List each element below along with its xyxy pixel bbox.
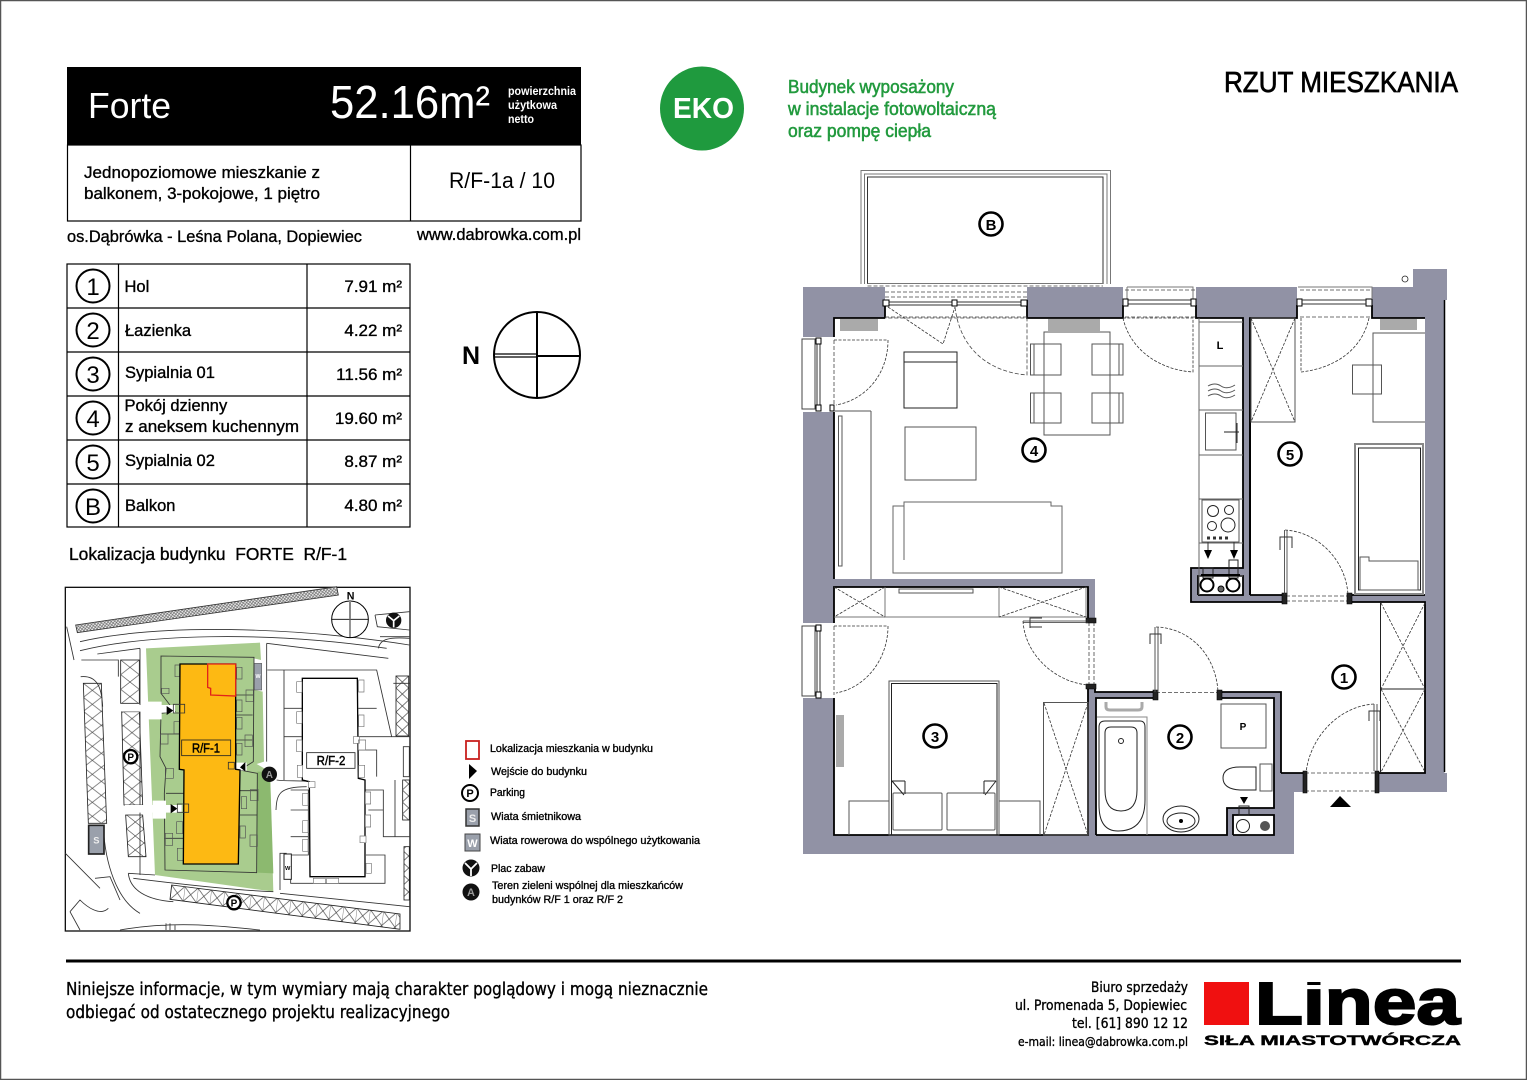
room label 4: 4 xyxy=(1030,443,1039,460)
area caption: netto xyxy=(508,112,534,126)
area: 52.16 m2: 52.16m² xyxy=(330,76,490,128)
site plan: label R/F-1 xyxy=(182,740,231,756)
legend: shared green area: Teren zieleni wspólnej dla mieszkańców xyxy=(492,880,683,892)
site plan: entrance markers xyxy=(167,704,245,813)
EKO description: oraz pompę ciepła xyxy=(788,121,932,141)
table of rooms: z aneksem kuchennym xyxy=(125,418,299,436)
hall wardrobe xyxy=(1380,603,1425,772)
site plan: parking icon: P xyxy=(127,752,134,763)
site plan: paths to entrances xyxy=(122,702,247,819)
site plan: bicycle shelter xyxy=(254,663,262,690)
table of rooms: Sypialnia 02 xyxy=(125,452,215,470)
legend: apartment location xyxy=(466,741,653,759)
site plan: shared green area icon: A xyxy=(266,770,273,781)
sales office contact: ul. Promenada 5, Dopiewiec xyxy=(1015,998,1187,1014)
site plan: parking icon xyxy=(124,750,137,763)
walls xyxy=(803,269,1447,854)
room label 5 xyxy=(1278,442,1302,466)
website: www.dabrowka.com.pl xyxy=(416,225,581,244)
EKO description: Budynek wyposażony xyxy=(788,77,954,97)
room label 5: 5 xyxy=(1286,447,1294,464)
site plan: waste shelter xyxy=(89,825,104,854)
room label B xyxy=(980,212,1002,236)
bedroom 3 furniture xyxy=(834,587,1088,835)
legend: bicycle shelter: W xyxy=(467,838,478,850)
floor plan xyxy=(801,170,1447,854)
legend: shared green area: budynków R/F 1 oraz R/F 2 xyxy=(492,894,623,906)
site plan: building R/F-2 xyxy=(302,678,365,877)
legend: parking: P xyxy=(466,788,474,800)
legend: parking: Parking xyxy=(490,787,525,799)
site plan: green area xyxy=(146,643,273,892)
site plan: waste shelter: S xyxy=(93,835,99,845)
site plan: parking icon: P xyxy=(231,898,238,909)
site plan: parking icon xyxy=(227,896,241,909)
header: description box xyxy=(68,145,581,221)
area caption xyxy=(508,84,576,126)
legend: waste shelter: S xyxy=(469,813,476,825)
table of rooms: 4.80 m² xyxy=(344,496,402,515)
legend: apartment location: Lokalizacja mieszkania w budynku xyxy=(490,743,653,755)
legend: playground: Plac zabaw xyxy=(491,863,545,875)
compass: north symbol: N xyxy=(462,342,480,370)
table of rooms: 7.91 m² xyxy=(344,277,402,296)
site plan: label R/F-1: R/F-1 xyxy=(192,742,220,756)
bedroom 5 furniture xyxy=(1251,318,1425,594)
header: description box: balkonem, 3-pokojowe, 1 piętro xyxy=(84,184,320,203)
legend: playground xyxy=(462,860,545,876)
bathroom fixtures: P xyxy=(1240,722,1247,733)
kitchen: L xyxy=(1217,340,1224,352)
table of rooms xyxy=(67,264,410,527)
table of rooms: B xyxy=(85,494,101,521)
area caption: użytkowa xyxy=(508,98,557,112)
disclaimer xyxy=(66,980,708,1023)
compass: north symbol xyxy=(462,312,580,398)
site plan: small bicycle shelter xyxy=(284,854,291,879)
rooms xyxy=(801,287,1425,835)
sales office contact: tel. [61] 890 12 12 xyxy=(1072,1016,1188,1032)
EKO badge xyxy=(660,66,744,150)
site plan: apartment location xyxy=(208,664,236,696)
sales office contact: Biuro sprzedaży xyxy=(1091,980,1188,996)
site plan: compass: N xyxy=(347,590,355,602)
room label 1 xyxy=(1332,666,1356,688)
heading: floor plan: RZUT MIESZKANIA xyxy=(1224,67,1459,99)
room label B: B xyxy=(986,217,997,234)
location heading: Lokalizacja budynku FORTE R/F-1 xyxy=(69,544,347,564)
table of rooms: 2 xyxy=(86,318,100,345)
table of rooms: 11.56 m² xyxy=(336,365,402,384)
bathroom fixtures xyxy=(1097,702,1272,835)
header: description box: Jednopoziomowe mieszkanie z xyxy=(84,163,320,182)
icon: entrance arrow xyxy=(1330,796,1351,807)
legend xyxy=(462,741,701,906)
table of rooms: 4 xyxy=(86,406,100,433)
room label 3: 3 xyxy=(931,729,939,746)
table of rooms: 5 xyxy=(86,450,100,477)
legend: building entrance xyxy=(469,764,587,779)
site plan: roads and paths xyxy=(65,612,409,930)
logo: Linea xyxy=(1204,982,1462,1046)
table of rooms: 8.87 m² xyxy=(344,452,402,471)
kitchen xyxy=(1199,318,1243,595)
header: black title bar xyxy=(67,67,581,145)
room label 2 xyxy=(1168,726,1192,748)
legend: building entrance: Wejście do budynku xyxy=(491,766,587,778)
table of rooms: Balkon xyxy=(125,497,175,515)
legend: shared green area xyxy=(462,880,683,906)
EKO description xyxy=(787,77,997,141)
table of rooms: 1 xyxy=(86,274,100,301)
sales office contact xyxy=(1015,980,1188,1049)
address: os.Dąbrówka - Leśna Polana, Dopiewiec xyxy=(67,227,362,246)
site plan: shared green area icon xyxy=(262,767,277,782)
sales office contact: e-mail: linea@dabrowka.com.pl xyxy=(1018,1035,1188,1049)
legend: waste shelter: Wiata śmietnikowa xyxy=(491,811,582,823)
site plan: small bicycle shelter: W xyxy=(285,866,291,872)
balcony xyxy=(861,170,1110,286)
legend: bicycle shelter xyxy=(465,834,701,851)
disclaimer: Niniejsze informacje, w tym wymiary mają charakter poglądowy i mogą nieznacznie xyxy=(66,980,708,1000)
room label 2: 2 xyxy=(1176,730,1184,747)
table of rooms: 4.22 m² xyxy=(344,321,402,340)
legend: shared green area: A xyxy=(467,887,475,899)
wall outlines xyxy=(834,300,1425,835)
site plan: playground icon xyxy=(386,613,401,628)
logo: Linea: SIŁA MIASTOTWÓRCZA xyxy=(1204,1031,1461,1048)
table of rooms: Pokój dzienny xyxy=(124,397,228,415)
table of rooms: Łazienka xyxy=(125,322,192,340)
outer small circle xyxy=(1402,276,1408,282)
title: Forte: Forte xyxy=(88,85,171,126)
logo: Linea: Linea xyxy=(1255,966,1460,1038)
room label 4 xyxy=(1022,438,1046,462)
site plan xyxy=(65,587,410,931)
header: description box: R/F-1a / 10 xyxy=(449,168,555,193)
table of rooms: Hol xyxy=(124,278,149,296)
area caption: powierzchnia xyxy=(508,84,576,98)
windows and door openings xyxy=(802,287,1379,793)
legend: parking xyxy=(462,785,525,801)
room label 1: 1 xyxy=(1340,670,1348,687)
table of rooms: 3 xyxy=(86,362,100,389)
site plan: label R/F-2 xyxy=(307,753,355,768)
EKO description: w instalacje fotowoltaiczną xyxy=(787,99,997,119)
table of rooms: 19.60 m² xyxy=(335,409,402,428)
site plan: private gardens xyxy=(160,656,257,873)
site plan: bicycle shelter: W xyxy=(255,674,261,680)
legend: bicycle shelter: Wiata rowerowa do wspólnego użytkowania xyxy=(490,835,701,847)
living room furniture xyxy=(834,319,1123,579)
site plan: compass xyxy=(332,590,368,638)
site plan: parking strips xyxy=(76,587,338,633)
site plan: label R/F-2: R/F-2 xyxy=(317,754,345,768)
EKO badge: EKO xyxy=(673,93,734,125)
site plan: building R/F-1 xyxy=(179,664,240,864)
room label 3 xyxy=(924,724,946,748)
table of rooms: Sypialnia 01 xyxy=(125,364,215,382)
door swings xyxy=(834,307,1380,773)
legend: waste shelter xyxy=(466,809,582,826)
disclaimer: odbiegać od ostatecznego projektu realizacyjnego xyxy=(66,1003,450,1023)
